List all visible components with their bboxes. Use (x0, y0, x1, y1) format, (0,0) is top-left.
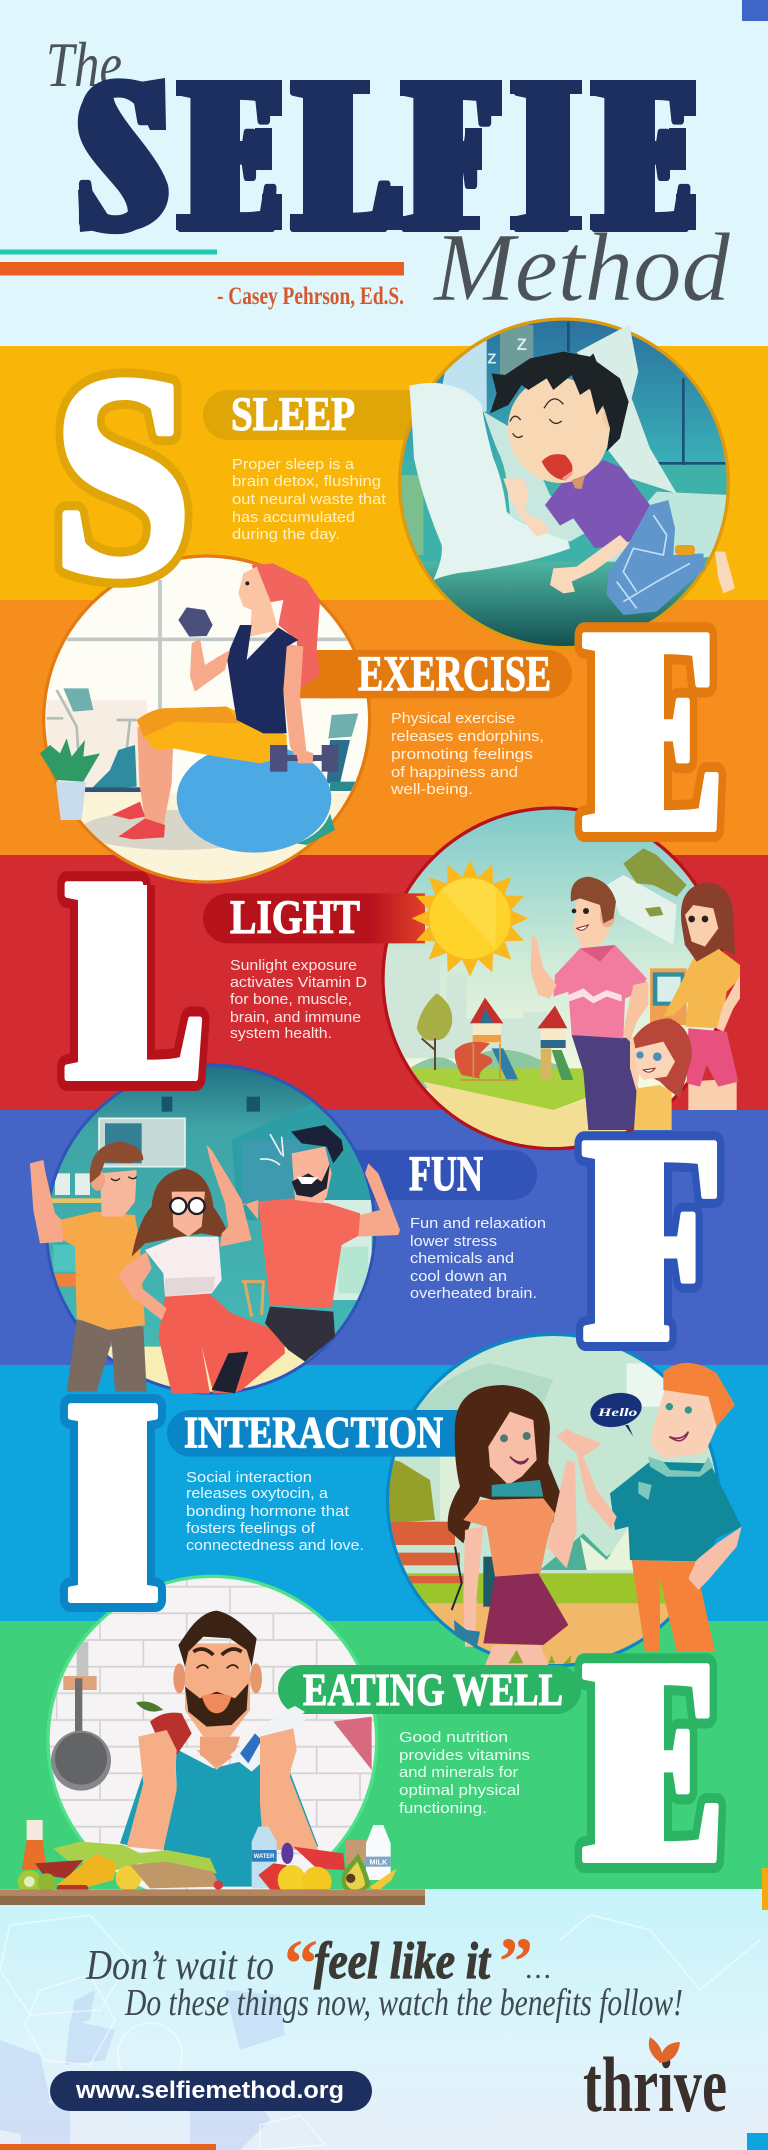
eyes and brows (510, 399, 563, 437)
exercise text (390, 711, 544, 798)
exercise ball (177, 744, 331, 853)
panel: exercise (30, 550, 572, 890)
bottle and hand (230, 1710, 307, 1783)
sun (412, 860, 528, 977)
arm (550, 535, 630, 593)
eye (245, 581, 249, 585)
exercise text: well-being. (390, 782, 473, 798)
quote line one (85, 1923, 551, 2001)
front pillow (409, 383, 570, 580)
tree (417, 993, 452, 1070)
sleep text: Proper sleep is a (232, 457, 355, 473)
raised arm (190, 638, 230, 692)
sleep illustration: Z (517, 335, 527, 354)
exercise text: releases endorphins, (391, 729, 544, 745)
letter E (exercise): E (580, 566, 728, 894)
sleep illustration (390, 315, 740, 652)
man (531, 877, 648, 1130)
foot (715, 552, 735, 593)
light illustration (203, 805, 740, 1155)
interaction illustration (167, 1330, 750, 1670)
speech bubble (587, 1388, 645, 1437)
pill square end (300, 650, 333, 698)
head and neck (238, 567, 278, 637)
water bottle (252, 1827, 277, 1888)
face (493, 363, 624, 497)
neck patch (572, 475, 585, 489)
panel: light (203, 805, 740, 1155)
colour bands (0, 346, 768, 1889)
foliage (623, 848, 687, 917)
man left (30, 1142, 147, 1392)
exercise text: of happiness and (391, 765, 518, 781)
exercise illustration background (30, 550, 572, 890)
panel: interaction (167, 1330, 750, 1670)
eating pill (278, 1665, 581, 1714)
letter F: F (580, 1073, 726, 1404)
eating text: Good nutrition (399, 1730, 508, 1746)
woman (663, 882, 740, 1110)
hexagon outlines (0, 1915, 760, 2150)
ball shadow (297, 813, 335, 845)
sleep text: out neural waste that (232, 492, 386, 508)
close quote: ” (499, 1923, 533, 1999)
heading: SLEEP: SLEEP (231, 388, 355, 441)
leggings (137, 707, 287, 763)
milk bottle (366, 1825, 391, 1880)
head (173, 1611, 262, 1767)
torso and arms (120, 1748, 318, 1887)
fun text: lower stress (410, 1234, 497, 1250)
panel: eating well (0, 1570, 581, 1910)
fun text: chemicals and (410, 1251, 514, 1267)
exercise text: Physical exercise (391, 711, 515, 727)
playground slide left (455, 998, 518, 1080)
striped pants (607, 500, 705, 615)
script word: The: The (46, 29, 122, 100)
letter I: I (62, 1336, 164, 1664)
ear (603, 405, 619, 429)
sauce bottle (22, 1820, 47, 1870)
letter I: I (62, 1336, 164, 1664)
ellipsis: ... (525, 1952, 551, 1985)
light text: Sunlight exposure (230, 958, 357, 974)
eating text: functioning. (399, 1801, 487, 1817)
corner block: bottom left (0, 2144, 216, 2150)
fun text: cool down an (410, 1269, 507, 1285)
open mouth (542, 454, 572, 480)
man (557, 1363, 742, 1652)
letter L: L (63, 815, 209, 1143)
footer background (0, 1889, 768, 2150)
author credit: - Casey Pehrson, Ed.S. (217, 283, 404, 310)
letter E (eating): E (580, 1597, 728, 1925)
exercise text: promoting feelings (391, 747, 533, 763)
grass (508, 1650, 572, 1663)
lower dumbbell (270, 745, 338, 772)
avocado and banana (342, 1853, 397, 1894)
playground slide right (537, 1006, 573, 1080)
footer panel (0, 1868, 768, 2150)
letter E (exercise): E (580, 566, 728, 894)
interaction text: releases oxytocin, a (186, 1486, 329, 1502)
salad and fruit left (18, 1842, 223, 1893)
plant (40, 738, 100, 820)
heading: LIGHT: LIGHT (230, 891, 360, 944)
exercise pill (300, 650, 572, 698)
interaction text: connectedness and love. (186, 1538, 364, 1554)
light pill (203, 893, 425, 943)
sleep text: brain detox, flushing (232, 474, 381, 490)
edge block: right (762, 1868, 768, 1910)
eating text: and minerals for (399, 1765, 518, 1781)
sleep text: has accumulated (232, 510, 355, 526)
navy tank top (227, 625, 298, 733)
shirt (545, 460, 650, 548)
quote line one: Don’t wait to (85, 1943, 274, 1989)
interaction text: bonding hormone that (186, 1504, 349, 1520)
fun text: Fun and relaxation (410, 1216, 546, 1232)
header title block (0, 29, 731, 322)
teal stripe (0, 250, 217, 254)
fun text: overheated brain. (410, 1286, 537, 1302)
apple and hand (136, 1701, 192, 1783)
letter L: L (63, 815, 209, 1143)
interaction text (186, 1470, 364, 1554)
speech bubble: Hello (597, 1405, 637, 1419)
sparkle lines (260, 1134, 283, 1165)
eating illustration (0, 1570, 430, 1910)
frying pan (51, 1678, 111, 1791)
interaction text: fosters feelings of (186, 1521, 316, 1537)
milk bottle: MILK (369, 1857, 388, 1866)
hand (503, 478, 550, 537)
light text: system health. (230, 1026, 332, 1042)
script word: Method: Method (432, 214, 731, 322)
heading: EATING WELL: EATING WELL (303, 1664, 563, 1715)
woman (448, 1385, 577, 1665)
light text: for bone, muscle, (230, 992, 352, 1008)
hair (252, 563, 320, 688)
letter S: S (52, 316, 192, 635)
letter E (eating): E (580, 1597, 728, 1925)
panel: fun (25, 1060, 546, 1400)
woman center (118, 1145, 285, 1393)
interaction pill (167, 1410, 460, 1457)
heading: FUN: FUN (409, 1145, 483, 1201)
fruit right (258, 1840, 373, 1897)
water bottle: WATER (254, 1854, 275, 1860)
sleep text (232, 457, 386, 543)
heading: INTERACTION: INTERACTION (184, 1408, 443, 1457)
sleep pill (203, 390, 443, 440)
interaction text: Social interaction (186, 1470, 312, 1486)
eating text (399, 1730, 530, 1817)
fun text (410, 1216, 546, 1302)
website pill: www.selfiemethod.org (75, 2077, 344, 2104)
sleep text: during the day. (232, 527, 340, 543)
corner block: bottom right (747, 2133, 768, 2150)
light text: brain, and immune (230, 1010, 361, 1026)
heading: EXERCISE: EXERCISE (358, 645, 551, 701)
title: SELFIE: SELFIE (73, 33, 696, 276)
feel like it: feel like it (314, 1933, 491, 1990)
fun illustration (25, 1060, 405, 1400)
leggings shade (137, 707, 240, 737)
lower hand (295, 747, 313, 763)
hexagon pattern (0, 1990, 285, 2150)
z letters: Z (487, 351, 496, 367)
raised dumbbell (178, 607, 213, 637)
bottle over pill (270, 1706, 305, 1728)
letter S: S (52, 316, 192, 635)
light text: activates Vitamin D (230, 975, 367, 991)
building (650, 968, 687, 1025)
lower arm (283, 643, 315, 763)
website pill (50, 2071, 372, 2111)
back pillow (577, 324, 677, 493)
logo leaves (649, 2037, 680, 2063)
hair (490, 352, 629, 452)
woman legs (137, 727, 173, 827)
shoes (112, 802, 165, 839)
light text (230, 958, 367, 1042)
man right (238, 1125, 400, 1362)
eating text: provides vitamins (399, 1748, 530, 1764)
table (0, 1889, 425, 1905)
corner block: top right (742, 0, 768, 21)
fun pill (333, 1150, 537, 1200)
panel: sleep (203, 315, 740, 652)
girl (630, 1018, 692, 1130)
letter F: F (580, 1073, 726, 1404)
eating text: optimal physical (399, 1783, 520, 1799)
orange stripe (0, 262, 404, 276)
open quote: “ (284, 1925, 318, 2001)
